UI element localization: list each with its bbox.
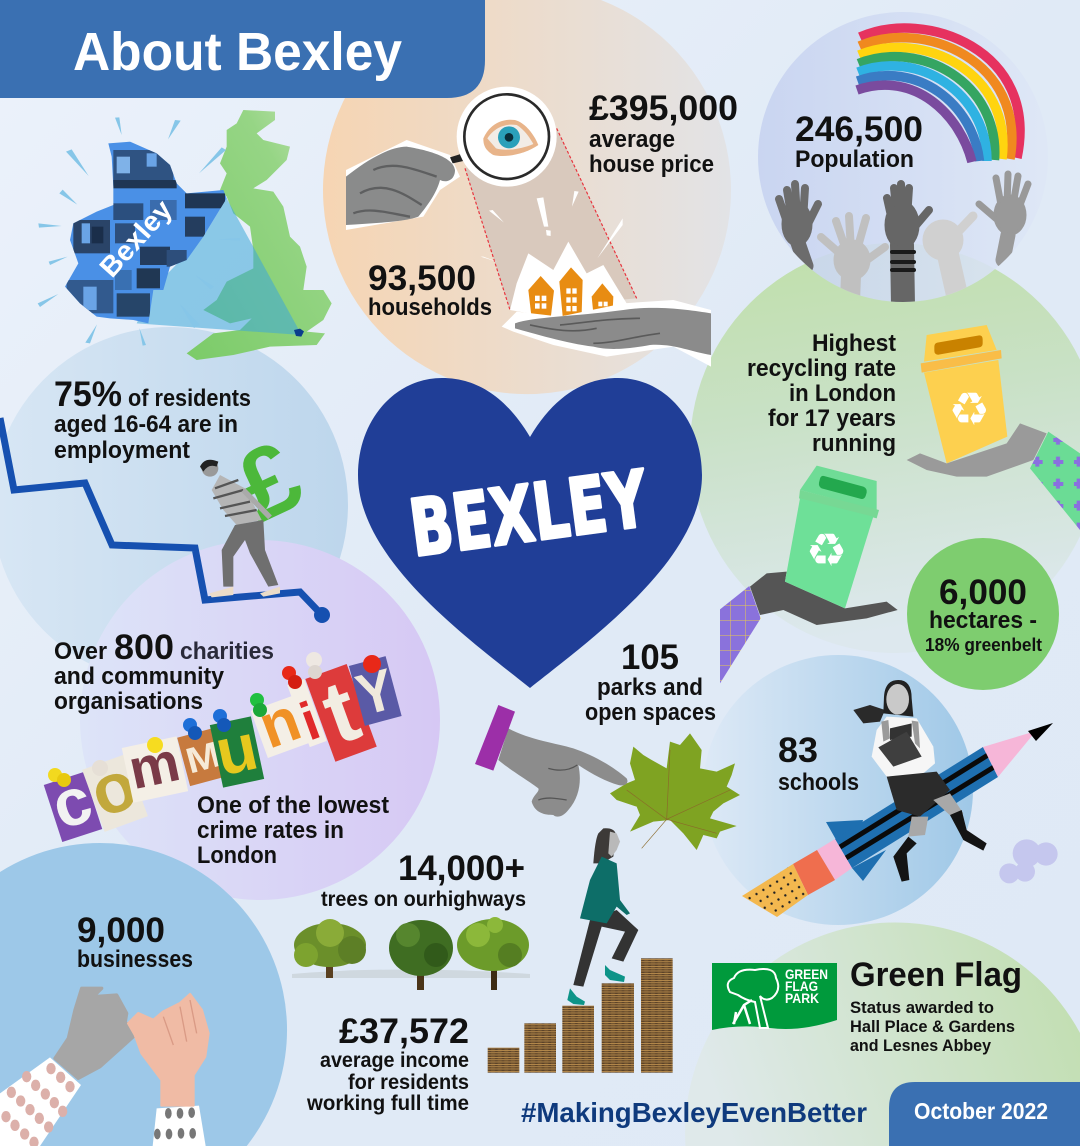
letter M: M <box>181 733 225 781</box>
hand 1 <box>779 184 818 266</box>
circle: businesses background <box>0 843 287 1146</box>
right hand <box>128 994 208 1105</box>
letter m: m <box>123 729 185 801</box>
stat: greenbelt: hectares - <box>929 607 1037 634</box>
stat: average income: for residents <box>348 1071 469 1094</box>
letter o: o <box>80 744 147 832</box>
stat: charities: 800 <box>114 628 174 667</box>
recycle symbol: ♻ <box>949 382 990 436</box>
circle: green flag background <box>685 922 1080 1146</box>
sunburst rays <box>38 117 240 346</box>
stat: population: Population <box>795 146 914 173</box>
letter n: n <box>250 684 309 762</box>
stat: trees: trees on ourhighways <box>321 888 526 911</box>
illustration: pointing hand and leaf <box>475 705 740 850</box>
zoom triangle <box>137 198 302 335</box>
title: About Bexley <box>73 22 402 82</box>
stat: population: 246,500 <box>795 110 923 149</box>
white burst behind houses <box>510 242 627 320</box>
cloud <box>999 839 1058 883</box>
exclamation sparks <box>481 191 623 262</box>
stat: green flag: Hall Place & Gardens <box>850 1017 1015 1036</box>
house windows <box>535 288 608 311</box>
stat: households: households <box>368 294 492 321</box>
thumbs up <box>927 216 973 295</box>
illustration: linked pinky hands <box>0 988 208 1146</box>
eye <box>483 120 538 156</box>
stat: charities <box>54 628 274 715</box>
stat: house price: house price <box>589 151 714 178</box>
illustration: magnifier over houses <box>346 87 711 367</box>
stat: average income <box>306 1012 469 1115</box>
stat: recycling text: running <box>812 430 896 457</box>
illustration: coin stacks and woman <box>488 828 673 1073</box>
illustration: three trees <box>292 917 530 990</box>
letter i: i <box>293 691 327 752</box>
hand 2 <box>821 216 885 302</box>
green bin <box>785 466 879 608</box>
stat: schools: schools <box>778 769 859 796</box>
map: UK and Bexley borough <box>38 110 332 360</box>
stat: employment <box>54 375 251 464</box>
stat: crime: London <box>197 842 277 869</box>
Bexley photo mosaic <box>60 137 230 327</box>
stat: green flag: Status awarded to <box>850 998 994 1017</box>
Bexley borough dot <box>294 329 304 337</box>
illustration: falling steps line <box>0 418 322 615</box>
map label: Bexley <box>93 194 178 283</box>
flowered sleeve <box>1030 432 1080 530</box>
stat: house price <box>589 89 738 178</box>
letter M <box>177 727 229 786</box>
date tab <box>889 1082 1080 1146</box>
letter i <box>287 679 329 753</box>
stat: businesses: 9,000 <box>77 911 165 950</box>
pencil end bands <box>817 839 852 880</box>
open hand holding houses <box>502 300 711 367</box>
recycle symbol: ♻ <box>806 523 847 577</box>
letter c: c <box>43 761 100 843</box>
hand <box>498 728 627 817</box>
stat: charities: charities <box>180 638 274 665</box>
push pins <box>48 652 381 787</box>
hashtag: #MakingBexleyEvenBetter <box>521 1097 867 1128</box>
stat: charities: Over <box>54 638 107 665</box>
stat: green flag <box>850 956 1022 1055</box>
circle: housing background <box>323 0 731 394</box>
stat: average income: average income <box>320 1049 469 1072</box>
circle: greenbelt background <box>907 538 1059 690</box>
hand 3 <box>886 184 929 305</box>
magnifier holding hand <box>346 140 460 230</box>
stat: population <box>795 110 923 173</box>
stat: parks: open spaces <box>585 699 716 726</box>
pencil tip <box>983 731 1036 777</box>
stat: employment: employment <box>54 437 190 464</box>
stat: house price: £395,000 <box>589 89 738 128</box>
pencil fins <box>826 820 886 881</box>
stat: green flag: Green Flag <box>850 956 1022 994</box>
stat: employment: 75% <box>54 375 122 414</box>
circle: employment background <box>0 327 348 683</box>
hand 5 <box>979 174 1028 260</box>
hair <box>593 828 616 863</box>
stat: recycling text <box>747 330 896 457</box>
stat: greenbelt <box>925 573 1042 655</box>
stat: parks <box>585 638 716 726</box>
stat: employment: of residents <box>128 385 251 412</box>
yellow bin hand <box>907 423 1047 477</box>
stat: households <box>368 259 492 321</box>
stat: parks: 105 <box>621 638 679 677</box>
letter y: Y <box>350 656 401 728</box>
stat: schools: 83 <box>778 731 818 770</box>
right sleeve <box>153 1106 206 1146</box>
stat: crime: One of the lowest <box>197 792 389 819</box>
UK silhouette <box>187 110 332 360</box>
man carrying pound <box>200 460 280 597</box>
heart label: BEXLEY <box>405 454 654 575</box>
maple leaf <box>610 733 740 850</box>
magnifier lens <box>457 87 557 187</box>
magnifier handle <box>450 153 465 163</box>
tree outline <box>728 969 778 1028</box>
stat: average income: £37,572 <box>339 1012 469 1051</box>
face <box>608 832 620 857</box>
letter u: u <box>209 709 264 789</box>
stat: parks: parks and <box>597 674 703 701</box>
stat: trees: 14,000+ <box>398 849 525 888</box>
illustration: yellow and green recycling bins on hands <box>720 325 1080 683</box>
illustration: rainbow <box>857 28 1020 162</box>
tree 1 <box>294 919 366 978</box>
stat: employment: aged 16-64 are in <box>54 411 238 438</box>
heart <box>358 378 702 688</box>
pound sign: £ <box>220 419 318 544</box>
stat: recycling text: recycling rate <box>747 355 896 382</box>
letter t: t <box>310 660 371 763</box>
cuff <box>475 705 515 771</box>
stat: crime: crime rates in <box>197 817 344 844</box>
girl <box>853 680 987 882</box>
illustration: pencil and schoolgirl <box>742 680 1058 917</box>
illustration: raised hands <box>779 174 1028 305</box>
stat: greenbelt: 18% greenbelt <box>925 635 1042 655</box>
pencil barrel <box>835 747 998 868</box>
coin stacks <box>488 958 673 1073</box>
stat: recycling text: for 17 years <box>768 405 896 432</box>
tree 3 <box>457 917 529 990</box>
left hand <box>55 988 143 1078</box>
logo wording: GREEN <box>785 966 828 982</box>
illustration: community cut-out letters <box>40 652 402 844</box>
logo wording: FLAG <box>785 978 818 994</box>
line end dot <box>314 607 330 623</box>
stat: average income: working full time <box>306 1092 469 1115</box>
jacket <box>580 857 630 923</box>
stat: house price: average <box>589 126 675 153</box>
green bin hand <box>750 572 898 625</box>
circle: schools background <box>703 655 973 925</box>
shoes <box>567 965 625 1005</box>
stat: green flag: and Lesnes Abbey <box>850 1036 992 1055</box>
circle: population background <box>758 12 1048 302</box>
stat: crime <box>197 792 389 869</box>
stat: greenbelt: 6,000 <box>939 573 1027 612</box>
trousers <box>573 910 638 987</box>
stat: businesses: businesses <box>77 946 193 973</box>
logo: green flag park <box>712 963 837 1030</box>
stat: schools <box>778 731 859 796</box>
header banner <box>0 0 485 98</box>
light beam <box>465 128 637 310</box>
logo wording: PARK <box>785 990 819 1006</box>
logo wording <box>785 966 828 1006</box>
family figures <box>733 1000 752 1024</box>
stat: businesses <box>77 911 193 973</box>
stat: recycling text: in London <box>789 380 896 407</box>
date label: October 2022 <box>914 1098 1048 1124</box>
checked sleeve <box>720 586 761 683</box>
tree 2 <box>389 920 453 990</box>
orange houses <box>528 267 613 318</box>
stat: charities: organisations <box>54 688 203 715</box>
circle: recycling background <box>690 243 1080 653</box>
stat: recycling text: Highest <box>812 330 896 357</box>
yellow bin <box>921 325 1007 463</box>
left sleeve <box>0 1057 81 1146</box>
stat: charities: and community <box>54 663 225 690</box>
stat: households: 93,500 <box>368 259 476 298</box>
circle: community background <box>80 540 440 900</box>
stat: trees <box>321 849 526 911</box>
